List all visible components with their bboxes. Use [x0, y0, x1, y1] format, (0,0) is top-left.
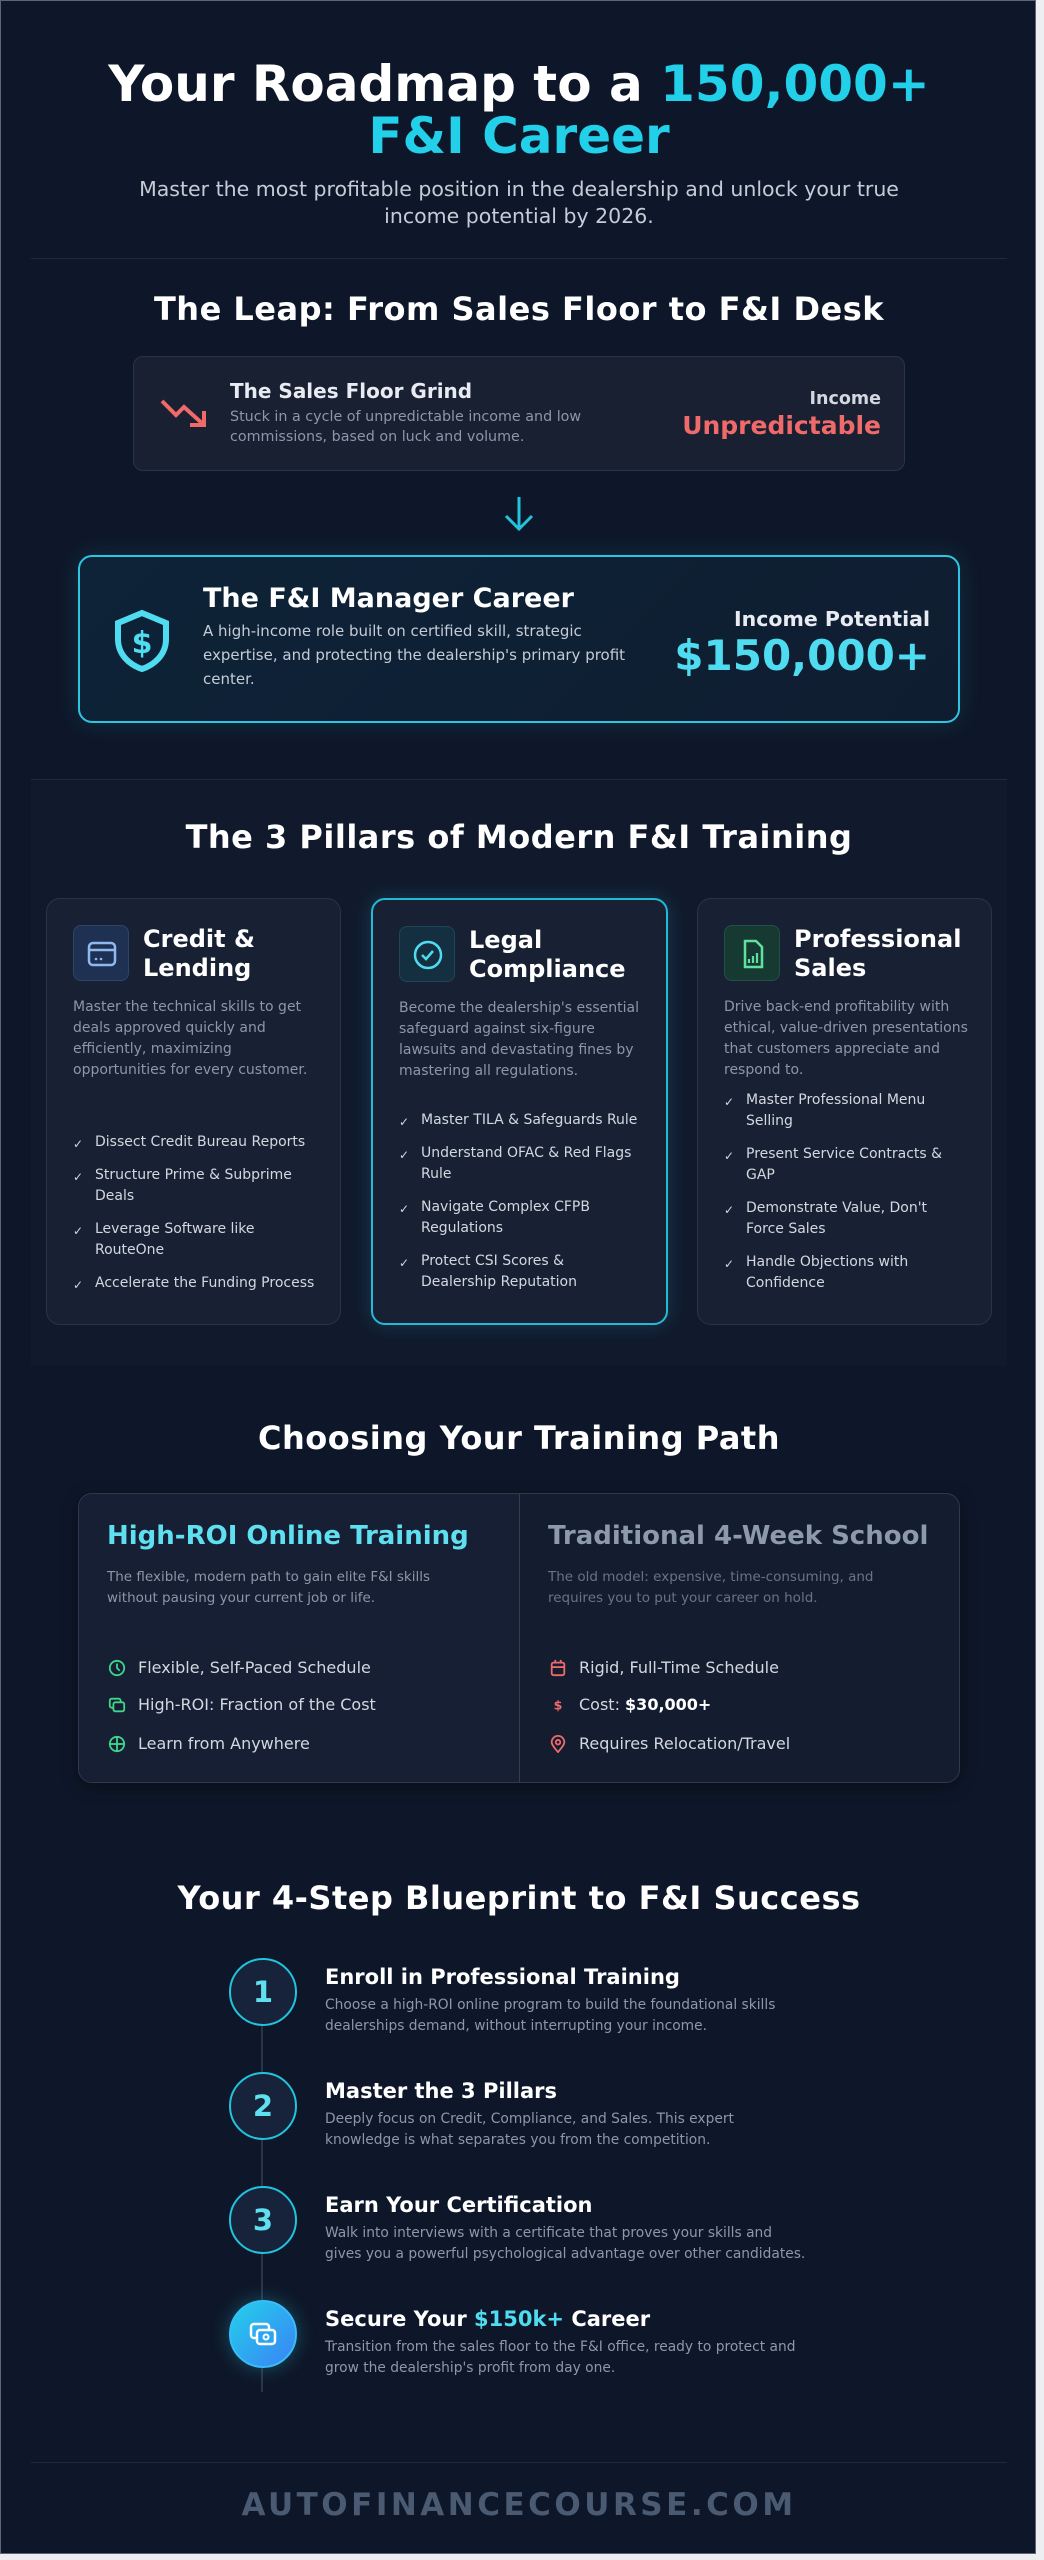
- icon: chart doc: [724, 925, 780, 981]
- step 1: Choose a high-ROI online program to build the foundational skills dealerships demand, without interrupting your income.: [325, 1997, 775, 2034]
- column: online training: Flexible, Self-Paced Schedule: [138, 1658, 371, 1677]
- pillar: legal compliance: Master TILA & Safeguards Rule: [421, 1112, 637, 1128]
- pillar: legal compliance: Legal: [469, 926, 542, 954]
- step 1: [229, 1958, 775, 2034]
- step 3: Earn Your Certification: [325, 2193, 593, 2217]
- pillar: professional sales: GAP: [746, 1167, 775, 1183]
- pillar: credit & lending: [46, 898, 341, 1325]
- subtitle: Master the most profitable position in the dealership and unlock your true income potential by 2026.: [139, 177, 899, 228]
- title: F&I Career: [368, 107, 670, 165]
- income potential: $150,000+: [674, 631, 930, 680]
- column: online training: The flexible, modern path to gain elite F&I skills without pausing your current job or life.: [107, 1569, 430, 1606]
- panel: 3 pillars: [31, 779, 1007, 1366]
- icon: shield: [115, 610, 169, 672]
- pillar: legal compliance: Protect CSI Scores &: [421, 1253, 564, 1269]
- card: F&I manager career: [78, 555, 960, 723]
- pillar: legal compliance: [371, 898, 668, 1325]
- pillar: credit & lending: Deals: [95, 1188, 134, 1204]
- icon: trending down: [160, 400, 206, 427]
- pillar: credit & lending: Leverage Software like: [95, 1221, 255, 1237]
- step 3: Walk into interviews with a certificate that proves your skills and: [325, 2225, 772, 2241]
- pillar: legal compliance: Compliance: [469, 955, 626, 983]
- column: traditional school: Cost: $30,000+: [579, 1695, 711, 1714]
- income: unpredictable: Income: [810, 389, 881, 409]
- column: traditional school: [548, 1521, 928, 1753]
- column: traditional school: Traditional 4-Week School: [548, 1521, 928, 1551]
- heading: pillars: The 3 Pillars of Modern F&I Training: [186, 818, 852, 856]
- arrow down: [505, 497, 533, 531]
- pillar: credit & lending: RouteOne: [95, 1242, 164, 1258]
- pillar: legal compliance: Rule: [421, 1166, 451, 1182]
- pillar: professional sales: Demonstrate Value, Don't: [746, 1200, 927, 1216]
- income: unpredictable: Unpredictable: [682, 411, 881, 440]
- card: sales floor grind: [133, 356, 905, 471]
- column: online training: [79, 1494, 520, 1782]
- income potential: Income Potential: [734, 607, 930, 631]
- pillar: professional sales: Confidence: [746, 1275, 825, 1291]
- panel: training comparison: [78, 1493, 960, 1783]
- text: sales floor: The Sales Floor Grind: [230, 379, 472, 403]
- title: [108, 55, 930, 165]
- icon: shield: $: [132, 626, 152, 661]
- pillar: credit & lending: Master the technical skills to get deals approved quickly and efficiently, maximizing opportunities for every customer.: [73, 999, 307, 1078]
- column: online training: High-ROI: Fraction of the Cost: [138, 1695, 376, 1714]
- step 2: Deeply focus on Credit, Compliance, and Sales. This expert: [325, 2111, 734, 2127]
- timeline line: [261, 1991, 263, 2392]
- pillar: legal compliance: Navigate Complex CFPB: [421, 1199, 590, 1215]
- column: online training: High-ROI Online Training: [107, 1521, 469, 1551]
- pillar: professional sales: [697, 898, 992, 1325]
- pillar: professional sales: Sales: [794, 954, 866, 982]
- text: sales floor: Stuck in a cycle of unpredictable income and low commissions, based on luck and volume.: [230, 409, 581, 445]
- column: traditional school: Requires Relocation/Travel: [579, 1734, 790, 1753]
- income: unpredictable: [682, 389, 881, 440]
- pillar: credit & lending: Accelerate the Funding Process: [95, 1275, 314, 1291]
- step 2: knowledge is what separates you from the competition.: [325, 2132, 710, 2148]
- step 2: 2: [253, 2089, 273, 2123]
- income potential: [674, 607, 930, 680]
- text: F&I career: The F&I Manager Career: [203, 583, 574, 614]
- pillar: legal compliance: Understand OFAC & Red Flags: [421, 1145, 631, 1161]
- heading: blueprint: Your 4-Step Blueprint to F&I Success: [177, 1879, 861, 1917]
- step 2: [229, 2072, 734, 2148]
- pillar: professional sales: Force Sales: [746, 1221, 826, 1237]
- heading: the leap: The Leap: From Sales Floor to F&I Desk: [154, 290, 884, 328]
- step 3: 3: [253, 2203, 273, 2237]
- step 4: Secure Your $150k+ Career: [325, 2307, 650, 2331]
- pillar: legal compliance: Regulations: [421, 1220, 503, 1236]
- pillar: professional sales: Handle Objections with: [746, 1254, 908, 1270]
- text: sales floor: [230, 379, 581, 445]
- step 3: gives you a powerful psychological advantage over other candidates.: [325, 2246, 805, 2262]
- step 1: 1: [253, 1975, 273, 2009]
- pillar: professional sales: Present Service Contracts &: [746, 1146, 942, 1162]
- text: F&I career: [203, 583, 625, 688]
- step 4: [220, 2292, 796, 2376]
- step 2: Master the 3 Pillars: [325, 2079, 557, 2103]
- pillar: professional sales: Professional: [794, 925, 961, 953]
- title: Your Roadmap to a 150,000+: [108, 55, 930, 113]
- pillar: legal compliance: Dealership Reputation: [421, 1274, 577, 1290]
- step 4: Transition from the sales floor to the F&I office, ready to protect and grow the dealership's profit from day one.: [325, 2339, 796, 2376]
- pillar: credit & lending: Credit &: [143, 925, 255, 953]
- heading: training path: Choosing Your Training Path: [258, 1419, 780, 1457]
- column: traditional school: $: [554, 1698, 562, 1713]
- pillar: professional sales: Selling: [746, 1113, 793, 1129]
- step 3: [229, 2186, 805, 2262]
- pillar: professional sales: Drive back-end profitability with ethical, value-driven presentations that customers appreciate and respond to.: [724, 999, 968, 1078]
- column: traditional school: The old model: expensive, time-consuming, and requires you to put your career on hold.: [548, 1569, 874, 1606]
- pillar: credit & lending: Lending: [143, 954, 251, 982]
- column: online training: Learn from Anywhere: [138, 1734, 310, 1753]
- step 1: Enroll in Professional Training: [325, 1965, 680, 1989]
- footer: AUTOFINANCECOURSE.COM: [241, 2487, 797, 2523]
- text: F&I career: A high-income role built on certified skill, strategic expertise, and protecting the dealership's primary profit center.: [203, 622, 625, 688]
- icon: check circle: [399, 926, 455, 982]
- pillar: credit & lending: Structure Prime & Subprime: [95, 1167, 292, 1183]
- pillar: professional sales: Master Professional Menu: [746, 1092, 925, 1108]
- pillar: credit & lending: Dissect Credit Bureau Reports: [95, 1134, 305, 1150]
- pillar: legal compliance: Become the dealership's essential safeguard against six-figure lawsuits and devastating fines by mastering all regulations.: [399, 1000, 639, 1079]
- icon: card: [73, 925, 129, 981]
- column: traditional school: Rigid, Full-Time Schedule: [579, 1658, 779, 1677]
